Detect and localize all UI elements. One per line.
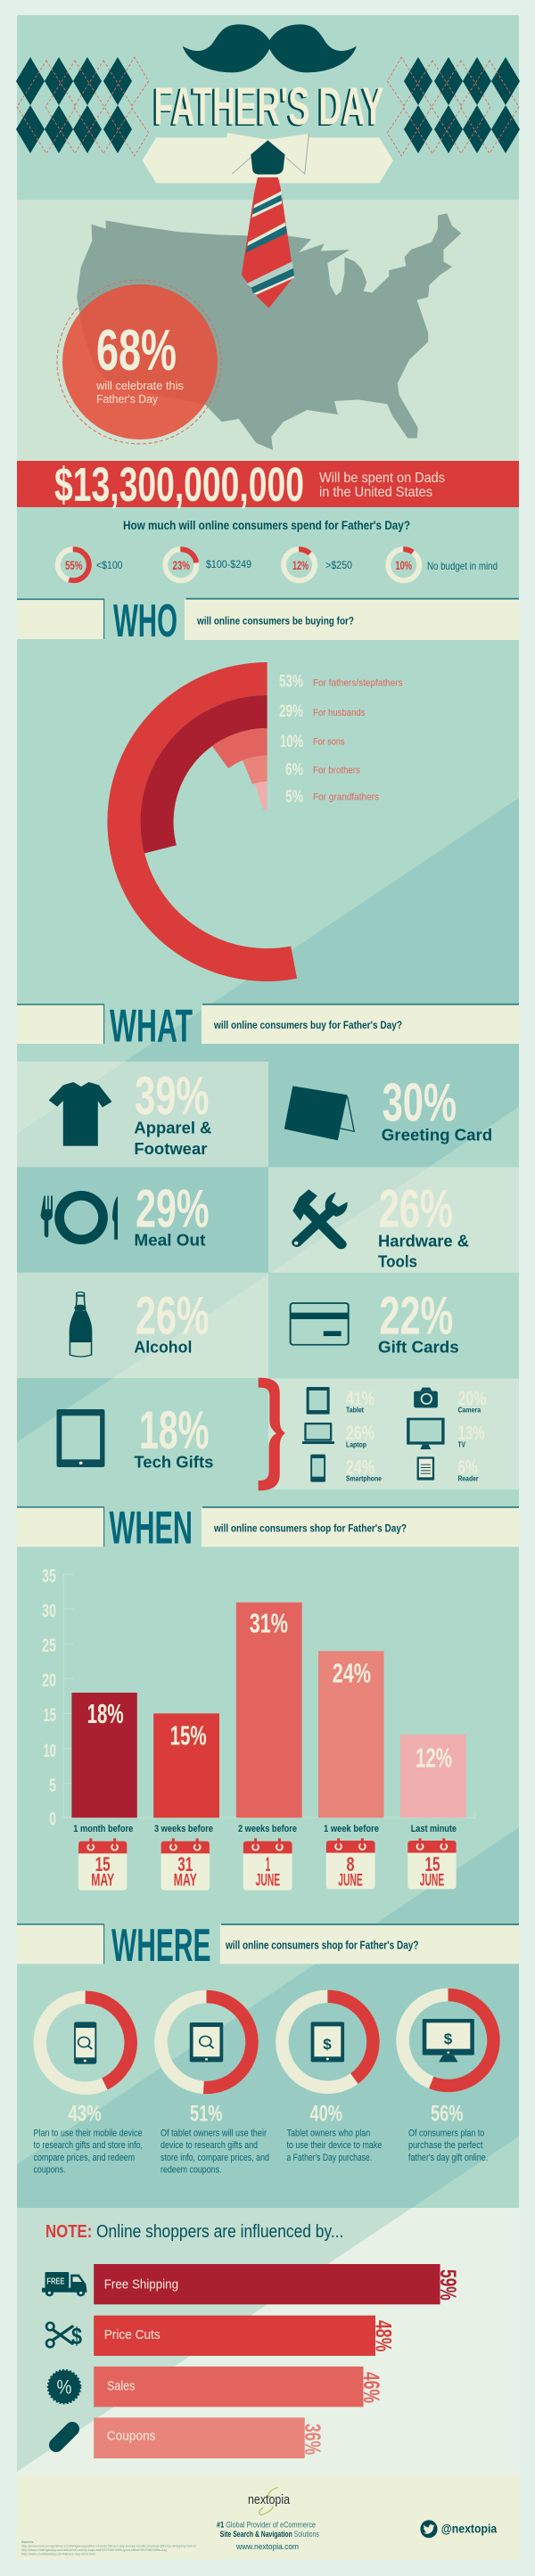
- icon: credit card: [291, 1303, 349, 1345]
- icon: greeting card: [284, 1086, 354, 1140]
- ring: fathers: [107, 662, 297, 981]
- section header: when: [17, 1503, 519, 1555]
- title: FATHER'S DAY: [152, 78, 382, 137]
- legend: who: 6%: [285, 760, 303, 779]
- stat: mobile research 43 percent: Plan to use their mobile device: [34, 2129, 143, 2139]
- donut 10 percent: 10%: [396, 558, 412, 572]
- legend: who: For fathers/stepfathers: [313, 677, 403, 688]
- legend: who: 5%: [285, 788, 303, 807]
- twitter handle: @nextopia: [441, 2522, 497, 2536]
- icon: plate and cutlery: [41, 1191, 118, 1244]
- map of the United States: [77, 213, 461, 450]
- panel: header background: [17, 15, 519, 200]
- legend: who: For grandfathers: [313, 792, 379, 803]
- axis labels: 30: [42, 1601, 56, 1621]
- diagonal band upper: [17, 798, 519, 1442]
- diagonal band lower: [17, 1827, 519, 2472]
- icon: monitor dollar: [423, 2019, 474, 2062]
- calendar: 8 June: [326, 1838, 375, 1891]
- bar: sales: 46%: [358, 2372, 383, 2403]
- calendar: 1 June: JUNE: [256, 1872, 280, 1891]
- footer: [17, 2475, 519, 2560]
- legend: who: [279, 673, 403, 807]
- donut 55 percent: 55%: [65, 558, 83, 572]
- panel: tech breakdown: Camera: [458, 1407, 482, 1415]
- panel: gift cards: [291, 1286, 459, 1356]
- stat: tablet purchase 40 percent: 40%: [310, 2101, 342, 2126]
- legend: who: 10%: [280, 733, 303, 751]
- legend: who: For husbands: [313, 708, 366, 718]
- axis labels: 0: [49, 1809, 56, 1830]
- icon: hammer and wrench: [292, 1189, 348, 1245]
- bar chart: when: 3 weeks before: [154, 1824, 213, 1834]
- panel: apparel: [17, 1062, 268, 1167]
- section header: where: [17, 1920, 519, 1972]
- bar chart: when: 31%: [250, 1608, 288, 1639]
- stat: consumers 56 percent: 56%: [431, 2101, 464, 2126]
- section header: what: WHAT: [110, 1000, 193, 1052]
- panel: tech breakdown: Laptop: [346, 1440, 366, 1448]
- calendar: 31 May: 31: [177, 1853, 193, 1875]
- donut 12 percent: [284, 549, 352, 580]
- panel: tech breakdown: Reader: [458, 1475, 478, 1483]
- panel: alcohol: 26%: [136, 1286, 210, 1346]
- legend: who: For brothers: [313, 765, 360, 775]
- calendar: 15 June: [407, 1838, 457, 1891]
- callout: 68 percent: will celebrate this: [95, 379, 184, 392]
- panel: tech gifts: Tech Gifts: [134, 1454, 213, 1472]
- panel: apparel: 39%: [135, 1066, 209, 1126]
- panel: tech gifts: 18%: [139, 1400, 210, 1460]
- panel: meal out: 29%: [136, 1179, 210, 1239]
- panel: apparel: Apparel &: [134, 1120, 211, 1137]
- stat: mobile research 43 percent: coupons.: [34, 2164, 66, 2175]
- icon: shirt collar banner: [143, 133, 393, 183]
- panel: tech breakdown: [259, 1378, 519, 1490]
- heading: note: NOTE:: [45, 2222, 92, 2242]
- bar values: 18%: [87, 1698, 124, 1729]
- section header: when: WHEN: [109, 1503, 193, 1555]
- bar labels: 1 month before: [73, 1824, 133, 1834]
- ring: sons: [212, 728, 268, 768]
- radial chart: who: [107, 662, 297, 981]
- panel: hardware and tools: [268, 1167, 519, 1273]
- bar chart: when: 15%: [170, 1719, 207, 1751]
- icon: necktie: [242, 177, 294, 308]
- callout: 68 percent: Father's Day: [96, 392, 158, 406]
- section header: when: will online consumers shop for Father's Day?: [213, 1522, 407, 1534]
- panel: tech breakdown: 26%: [346, 1422, 374, 1444]
- icon: percent badge: %: [57, 2376, 71, 2399]
- stat: mobile research 43 percent: to research gifts and store info,: [34, 2140, 143, 2151]
- calendar: 15 May: [78, 1838, 127, 1891]
- heading: note: Online shoppers are influenced by...: [96, 2222, 343, 2242]
- stat: mobile research 43 percent: 43%: [68, 2101, 102, 2126]
- axis labels: 20: [42, 1670, 56, 1691]
- bar chart: when: 24%: [333, 1657, 371, 1688]
- icon: scissors and dollar: [46, 2323, 82, 2350]
- panel: map background: [17, 200, 519, 461]
- bar: free shipping: Free Shipping: [104, 2277, 178, 2292]
- sources: http://www.creditdonkey.com/fathers-day-2013.html: [21, 2553, 95, 2556]
- icon: free delivery truck: FREE: [46, 2277, 65, 2286]
- stat: tablet purchase 40 percent: [282, 1997, 382, 2163]
- stat: tablet research 51 percent: [160, 1997, 269, 2175]
- sources: [21, 2540, 196, 2556]
- logo: nextopia: nextopia: [248, 2492, 291, 2507]
- bar chart: when: Last minute: [411, 1824, 457, 1834]
- section header: who: will online consumers be buying for?: [196, 615, 354, 628]
- donut 23 percent: 23%: [173, 558, 190, 572]
- icon: free delivery truck: [42, 2272, 87, 2296]
- axis labels: 5: [49, 1776, 56, 1796]
- bar chart: when: 12%: [416, 1742, 452, 1773]
- ring: grandfathers: [255, 782, 268, 810]
- stat: tablet purchase 40 percent: a Father's Day purchase.: [287, 2153, 372, 2163]
- legend: who: 53%: [279, 673, 303, 692]
- panel: meal out: Meal Out: [134, 1232, 205, 1250]
- icon: phone search: [74, 2022, 96, 2064]
- bar: price cuts: 48%: [371, 2320, 396, 2351]
- panel: gift cards: 22%: [380, 1286, 453, 1346]
- panel: tech breakdown: 41%: [346, 1388, 374, 1410]
- stat: tablet research 51 percent: Of tablet owners will use their: [160, 2129, 267, 2139]
- donut 55 percent: [58, 549, 123, 580]
- stat: consumers 56 percent: $: [444, 2030, 453, 2047]
- icon: twitter: [420, 2520, 438, 2538]
- panel: greeting card: Greeting Card: [382, 1126, 492, 1144]
- calendar: 31 May: [161, 1838, 210, 1891]
- title: FATHER'S DAY: [153, 77, 383, 135]
- title: [152, 77, 383, 137]
- section header: where: WHERE: [111, 1920, 210, 1972]
- icon: curly brace: [259, 1378, 285, 1490]
- sources: http://www.retailingtoday.com/article/nrf-survey-says-dad%E2%80%99s-good-father%E2%80%99s-day: [21, 2548, 167, 2552]
- bar: coupons: Coupons: [107, 2428, 155, 2443]
- icon: tablet: [57, 1409, 104, 1467]
- donut 23 percent: [165, 549, 251, 580]
- tagline: www.nextopia.com: [235, 2542, 299, 2552]
- panel: meal out: [41, 1179, 210, 1250]
- bar: free shipping: [94, 2264, 460, 2304]
- title: FATHER'S DAY: [152, 78, 383, 137]
- sources: http://pressroom.prosgrabber.com/blog/prosgrabber-reveals-fathers-day-survey-results-practical-gifts-top-shopping-lists-2/: [21, 2544, 196, 2547]
- bar: free shipping: 59%: [435, 2269, 460, 2301]
- calendar: 15 June: 15: [424, 1853, 440, 1875]
- bar chart: when: 1 week before: [324, 1824, 379, 1834]
- icon: moustache: [183, 24, 357, 72]
- stat: tablet research 51 percent: redeem coupons.: [160, 2164, 221, 2175]
- banner: total spend: in the United States: [319, 485, 432, 500]
- banner: total spend: Will be spent on Dads: [319, 471, 445, 486]
- donut 10 percent: No budget in mind: [427, 560, 498, 572]
- donut 23 percent: $100-$249: [206, 558, 251, 570]
- icon: percent badge: [48, 2370, 80, 2403]
- calendar: 15 May: 15: [95, 1853, 111, 1875]
- bar: coupons: [94, 2417, 325, 2458]
- callout: 68 percent: [57, 280, 221, 444]
- stat: mobile research 43 percent: compare prices, and redeem: [34, 2153, 135, 2163]
- panel: tech gifts: [57, 1400, 213, 1472]
- axis labels: 25: [42, 1636, 56, 1656]
- panel: tech breakdown: 6%: [458, 1456, 478, 1478]
- argyle pattern right: [387, 57, 520, 156]
- panel: tech breakdown: 20%: [458, 1388, 487, 1410]
- calendar: 15 June: JUNE: [420, 1872, 444, 1891]
- callout: 68 percent: 68%: [96, 317, 177, 382]
- stat: tablet purchase 40 percent: to use their device to make: [287, 2140, 382, 2151]
- ring: brothers: [243, 756, 268, 784]
- panel: note: [17, 2208, 519, 2476]
- chart axes: [63, 1574, 475, 1817]
- panel: greeting card: 30%: [383, 1073, 457, 1133]
- stat: consumers 56 percent: purchase the perfect: [408, 2140, 482, 2151]
- stat: consumers 56 percent: father's day gift online.: [408, 2153, 488, 2163]
- panel: tech breakdown: Smartphone: [346, 1475, 382, 1483]
- icons: devices: [302, 1387, 445, 1482]
- calendar: 15 May: MAY: [91, 1872, 114, 1891]
- stat: tablet research 51 percent: store info, compare prices, and: [160, 2153, 269, 2163]
- tagline: #1 Global Provider of eCommerce: [217, 2521, 316, 2531]
- panel: apparel: Footwear: [134, 1140, 207, 1158]
- stat: tablet purchase 40 percent: Tablet owners who plan: [287, 2129, 370, 2139]
- axis labels: 35: [42, 1566, 56, 1587]
- panel: tech breakdown: TV: [458, 1440, 465, 1448]
- banner: total spend: $13,300,000,000: [54, 458, 304, 512]
- bar: coupons: 36%: [300, 2424, 325, 2455]
- bars: [71, 1693, 137, 1817]
- panel: hardware and tools: Tools: [378, 1253, 417, 1271]
- legend: who: 29%: [279, 702, 303, 721]
- argyle pattern left: [16, 57, 149, 156]
- bar chart: when: [42, 1566, 475, 1834]
- stat: consumers 56 percent: [403, 1995, 494, 2163]
- panel: hardware and tools: 26%: [379, 1179, 453, 1239]
- bar: price cuts: Price Cuts: [104, 2327, 160, 2342]
- icon: tablet search: [190, 2022, 223, 2062]
- stat: tablet purchase 40 percent: $: [323, 2036, 332, 2053]
- icon: t-shirt: [49, 1082, 112, 1146]
- panel: gift cards: Gift Cards: [378, 1338, 459, 1356]
- sources: Sources:: [21, 2540, 34, 2544]
- panel: hardware and tools: Hardware &: [378, 1232, 469, 1250]
- icon: bottle: [70, 1292, 92, 1357]
- bar: sales: Sales: [107, 2379, 135, 2394]
- bar chart: when: 2 weeks before: [238, 1824, 297, 1834]
- icon: tablet dollar: [311, 2022, 344, 2062]
- panel: tech breakdown: 13%: [458, 1422, 485, 1444]
- section header: what: [17, 1000, 519, 1052]
- icon: scissors and dollar: $: [71, 2323, 82, 2350]
- ring: husbands: [141, 695, 268, 853]
- section header: who: WHO: [113, 595, 177, 647]
- section header: what: will online consumers buy for Father's Day?: [213, 1019, 402, 1031]
- logo: nextopia: [248, 2488, 291, 2515]
- stat: tablet research 51 percent: 51%: [190, 2101, 223, 2126]
- calendar: 8 June: 8: [346, 1853, 355, 1875]
- axis labels: [42, 1566, 56, 1830]
- axis labels: 10: [43, 1741, 56, 1761]
- stat: tablet research 51 percent: device to research gifts and: [160, 2140, 258, 2151]
- calendar: 1 June: [243, 1838, 292, 1891]
- panel: main content background: [17, 507, 519, 2208]
- panel: greeting card: [284, 1073, 492, 1144]
- tagline: Site Search & Navigation Solutions: [220, 2530, 319, 2539]
- calendar: 1 June: 1: [266, 1853, 270, 1875]
- section header: who: [17, 595, 519, 647]
- stat: consumers 56 percent: Of consumers plan to: [408, 2129, 484, 2139]
- panel: tech breakdown: 24%: [346, 1456, 374, 1478]
- panel: alcohol: Alcohol: [134, 1338, 192, 1356]
- donut 55 percent: <$100: [96, 559, 123, 571]
- donut 12 percent: 12%: [292, 558, 309, 572]
- panel: alcohol: [17, 1273, 268, 1378]
- stat: mobile research 43 percent: [34, 1998, 143, 2175]
- tagline: [217, 2521, 319, 2552]
- legend: who: For sons: [313, 737, 345, 748]
- calendars: [78, 1838, 457, 1891]
- calendar: 31 May: MAY: [174, 1872, 197, 1891]
- bar: price cuts: [94, 2316, 395, 2356]
- heading: how much: How much will online consumers spend for Father's Day?: [123, 518, 410, 532]
- donut 10 percent: [388, 549, 498, 580]
- bar: sales: [94, 2367, 383, 2407]
- panel: tech breakdown: Tablet: [346, 1407, 364, 1415]
- icon: coupon: [56, 2429, 72, 2445]
- calendar: 8 June: JUNE: [338, 1872, 363, 1891]
- axis labels: 15: [43, 1705, 56, 1726]
- spend donut charts: [58, 549, 498, 580]
- section header: where: will online consumers shop for Father's Day?: [225, 1940, 419, 1952]
- donut 12 percent: >$250: [325, 559, 352, 571]
